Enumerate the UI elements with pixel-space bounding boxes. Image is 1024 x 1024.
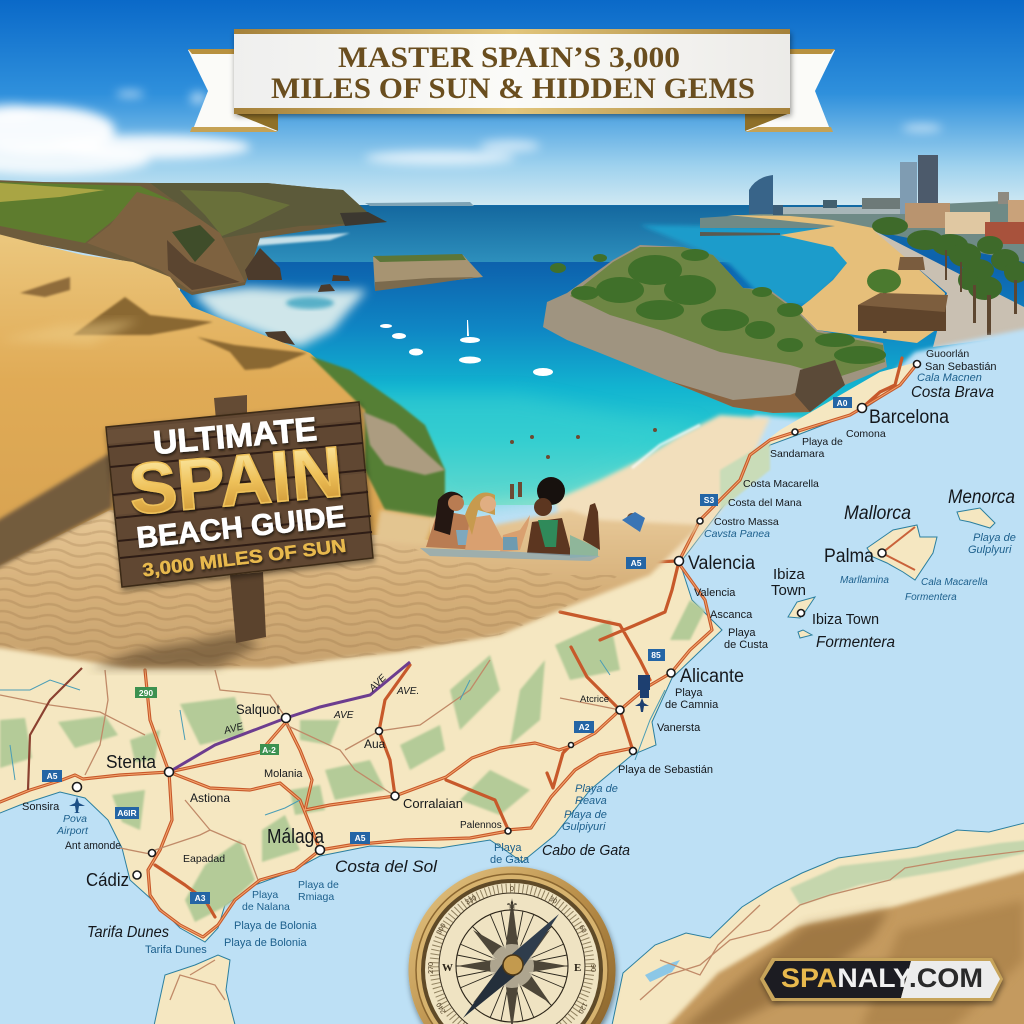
map labels: blue beaches: Rmiaga <box>298 891 334 903</box>
compass degree numbers: 270 <box>428 962 435 974</box>
label: Palma: Palma <box>824 546 874 567</box>
logo light half <box>901 961 1000 998</box>
map labels: blue beaches: Playa de <box>973 532 1016 544</box>
breakwater <box>700 232 780 236</box>
sign line: 3,000 miles of sun: 3,000 MILES OF SUN <box>141 535 347 580</box>
beach swimmers <box>510 428 657 523</box>
compass star centre speckle <box>490 944 534 988</box>
map labels: blue beaches: Gulplyuri <box>968 544 1012 556</box>
beach foam line <box>632 425 700 468</box>
post shadow <box>90 632 260 668</box>
map labels: small black places: Playa de Sebastián <box>618 764 713 776</box>
compass degree numbers: 330 <box>464 895 478 907</box>
map labels: regions in italic <box>87 384 1015 941</box>
map labels: small black places: Guoorlán <box>926 348 969 360</box>
map labels: blue beaches <box>56 372 1016 956</box>
label: Mallorca: Mallorca <box>844 503 911 524</box>
towels <box>420 548 600 561</box>
brand logo badge <box>760 958 1003 1001</box>
map labels: blue beaches: Gulpiyuri <box>562 821 606 833</box>
turquoise sea <box>180 205 1024 505</box>
map labels: blue beaches: Playa de Bolonia <box>234 920 317 932</box>
title line 1: MASTER SPAIN’S 3,000 <box>338 41 680 74</box>
label: Valencia: Valencia <box>688 553 755 574</box>
compass ring line <box>439 893 585 1024</box>
beach bar <box>858 293 948 331</box>
map labels: small black places: Costa Macarella <box>743 478 819 490</box>
logo frame <box>760 958 1003 1001</box>
rivers <box>0 660 665 815</box>
lagoon shallow <box>360 395 700 510</box>
map labels: blue beaches: Cavsta Panea <box>704 528 770 540</box>
map labels: rail AVE: AVE <box>367 672 389 695</box>
south coast land bottom right <box>608 818 1024 1024</box>
slope rocks <box>363 412 445 475</box>
map labels: blue beaches: Reava <box>575 795 607 807</box>
map labels: blue beaches: Tarifa Dunes <box>145 944 207 956</box>
shield row blue <box>42 397 852 904</box>
compass dial <box>425 883 599 1024</box>
foreground sand dune <box>0 232 700 668</box>
map labels: small black places: Molania <box>264 768 303 780</box>
compass degree numbers: 120 <box>576 1001 588 1015</box>
lake <box>645 960 680 982</box>
logo dark half <box>764 961 911 998</box>
map labels: blue beaches: Pova <box>63 813 87 825</box>
desert sand bottom right <box>651 866 1024 1024</box>
label: Stenta: Stenta <box>106 752 157 772</box>
ribbon tails <box>188 49 835 132</box>
label: Costa Brava: Costa Brava <box>911 384 994 401</box>
friend left <box>426 492 480 550</box>
shield row green <box>135 687 279 755</box>
border line <box>28 668 82 790</box>
person on beach towel <box>622 512 645 532</box>
map labels: small black places: Costro Massa <box>714 516 779 528</box>
label: Málaga: Málaga <box>267 826 325 848</box>
balearic islands <box>788 508 995 638</box>
map labels: blue beaches: Playa <box>252 889 278 901</box>
compass inner rim <box>421 879 603 1024</box>
map labels: small black places: Playa <box>728 627 756 639</box>
right city beach <box>727 215 945 343</box>
map labels: blue beaches: de Gata <box>490 854 530 866</box>
sign post <box>214 395 266 643</box>
label: Ibiza Town stacked: Town <box>771 582 806 599</box>
map labels: small black places: Astiona <box>190 791 230 805</box>
map labels: small black places: Aua <box>364 737 386 751</box>
map labels: small black places: Valencia <box>694 587 736 599</box>
compass case <box>408 866 616 1024</box>
map labels: blue beaches: Playa de Bolonia <box>224 937 307 949</box>
airport icon west <box>69 797 85 813</box>
map labels: small black places: Vanersta <box>657 722 701 734</box>
compass rose star <box>457 898 568 1024</box>
map labels: blue beaches: de Nalana <box>242 901 290 913</box>
three friends on the sand <box>420 477 600 561</box>
sign line: spain: SPAIN <box>126 432 346 530</box>
compass degree numbers: 60 <box>577 924 587 934</box>
map sea <box>0 325 1024 1024</box>
map labels: small black places: San Sebastián <box>925 361 997 373</box>
main roads network <box>0 358 917 937</box>
city skyline <box>700 155 1024 262</box>
north africa land <box>150 955 240 1024</box>
secondary roads <box>0 660 620 880</box>
boats <box>380 320 553 376</box>
central rocky island <box>543 245 887 413</box>
map labels: blue beaches: Airport <box>56 825 89 837</box>
map labels: small black places: Eapadad <box>183 853 225 865</box>
shield labels: A0 <box>837 398 848 408</box>
map labels: blue beaches: Cala Macnen <box>917 372 982 384</box>
sign line: ultimate: ULTIMATE <box>152 410 318 461</box>
map labels: small black places: Ascanca <box>710 609 753 621</box>
compass hub <box>503 955 523 975</box>
map labels: small black places: de Camnia <box>665 699 719 711</box>
label: Alicante: Alicante <box>680 666 744 687</box>
map labels: small black places: Atcrice <box>580 694 609 705</box>
shield labels: A5 <box>631 558 642 568</box>
shield labels: A2 <box>579 722 590 732</box>
label: Ibiza Town: Ibiza Town <box>812 611 879 628</box>
map labels: blue beaches: Formentera <box>905 592 957 603</box>
road shields <box>42 397 852 904</box>
island pine clumps <box>550 249 886 364</box>
sign text <box>126 410 347 580</box>
label: Cádiz: Cádiz <box>86 870 129 890</box>
sky background <box>0 0 1024 208</box>
map labels: blue beaches: Playa de <box>298 879 339 891</box>
north africa roads <box>170 960 225 1000</box>
map labels: blue beaches: Playa <box>494 842 522 854</box>
clouds <box>0 91 942 175</box>
distant horizon land <box>365 202 474 206</box>
map labels: small black places <box>22 348 997 865</box>
map labels: rail AVE <box>222 672 419 737</box>
map labels: small black places: Comona <box>846 428 886 440</box>
upper sea band <box>220 206 860 262</box>
map labels: blue beaches: Playa de <box>564 809 607 821</box>
alicante airport and castle icon <box>635 675 650 712</box>
map labels: small black places: Playa <box>675 687 703 699</box>
small rocky islet <box>373 254 483 291</box>
map labels: small black places: Costa del Mana <box>728 497 802 509</box>
shield labels: 290 <box>139 688 153 698</box>
shield labels: 85 <box>651 650 661 660</box>
wooden sign <box>106 395 373 643</box>
compass degree numbers: 0 <box>510 886 514 893</box>
friend right <box>527 477 600 558</box>
compass inner circle <box>456 910 568 1022</box>
map labels: small black places: Ant amonde <box>65 840 121 852</box>
map labels: blue beaches: Cala Macarella <box>921 577 988 588</box>
map green terrain patches <box>0 440 770 922</box>
friend centre <box>465 492 530 552</box>
map labels: small black places: Playa de <box>802 436 843 448</box>
map labels: small black places: Corralaian <box>403 797 463 811</box>
compass rose rays <box>456 910 568 1022</box>
compass fleur-de-lis: ⚜ <box>505 897 519 915</box>
beach sand spit <box>555 415 770 572</box>
compass east letter: E <box>574 962 581 974</box>
map labels: small black places: Sonsira <box>22 801 60 813</box>
balearic roads <box>882 527 915 570</box>
beach palm tree <box>867 269 901 333</box>
label: Menorca: Menorca <box>948 487 1015 508</box>
coast outline <box>0 362 917 942</box>
green slope vegetation <box>310 356 445 518</box>
sign line: beach guide: BEACH GUIDE <box>135 500 347 555</box>
label: Costa del Sol: Costa del Sol <box>335 857 438 876</box>
title ribbon <box>188 29 835 132</box>
map labels: small black places: Palennos <box>460 820 502 831</box>
shield labels: A5 <box>47 771 58 781</box>
city markers <box>72 360 920 879</box>
map land mainland <box>0 362 917 942</box>
label: Cabo de Gata: Cabo de Gata <box>542 842 630 859</box>
compass degree numbers: 90 <box>589 964 596 972</box>
sign planks <box>106 402 373 587</box>
ribbon gold bands <box>234 29 790 114</box>
compass degree ring <box>434 888 590 1024</box>
shield labels <box>47 398 848 903</box>
compass degree numbers: 240 <box>436 1001 448 1015</box>
title line 2: MILES OF SUN & HIDDEN GEMS <box>271 72 755 105</box>
label: Barcelona: Barcelona <box>869 407 949 428</box>
compass needle south <box>463 960 520 1018</box>
map labels: rail AVE: AVE <box>222 721 245 737</box>
map labels: blue beaches: Marllamina <box>840 575 889 586</box>
shield labels: A5 <box>355 833 366 843</box>
logo text: SPANALY.COM <box>781 963 983 993</box>
compass degree numbers: 30 <box>548 896 558 906</box>
map labels: cities <box>86 407 949 890</box>
label: Salquot: Salquot <box>236 701 280 717</box>
surf foam <box>192 233 367 347</box>
left headland <box>0 180 387 295</box>
label: Ibiza Town stacked: Ibiza <box>773 566 805 583</box>
shield labels: S3 <box>704 495 714 505</box>
title text <box>271 41 755 105</box>
compass west letter: W <box>442 962 453 974</box>
map labels: small black places: de Custa <box>724 639 769 651</box>
sea rocks <box>245 248 350 345</box>
shield labels: A6IR <box>117 808 137 818</box>
map labels: rail AVE: AVE <box>333 710 354 721</box>
label: Formentera: Formentera <box>816 634 895 651</box>
map labels: small black places: Sandamara <box>770 448 824 460</box>
promenade <box>873 230 1024 347</box>
south land greens <box>790 840 1024 905</box>
compass needle <box>505 914 559 972</box>
compass <box>408 866 616 1024</box>
palm promenade trees <box>872 217 1024 335</box>
map labels: blue beaches: Playa de <box>575 783 618 795</box>
ribbon panel <box>234 30 790 113</box>
map labels: rail AVE: AVE. <box>396 686 419 697</box>
AVE rail line <box>169 662 410 772</box>
shield labels: A3 <box>195 893 206 903</box>
sand patch below vegetation <box>375 510 435 545</box>
small beach kiosk <box>898 257 925 270</box>
compass degree numbers <box>428 886 596 1015</box>
compass rim highlight <box>416 874 608 1024</box>
south land roads <box>640 850 1024 1000</box>
right bay water <box>640 225 850 305</box>
compass degree numbers: 300 <box>436 922 448 936</box>
label: Tarifa Dunes: Tarifa Dunes <box>87 924 169 941</box>
shield labels: A-2 <box>262 745 276 755</box>
